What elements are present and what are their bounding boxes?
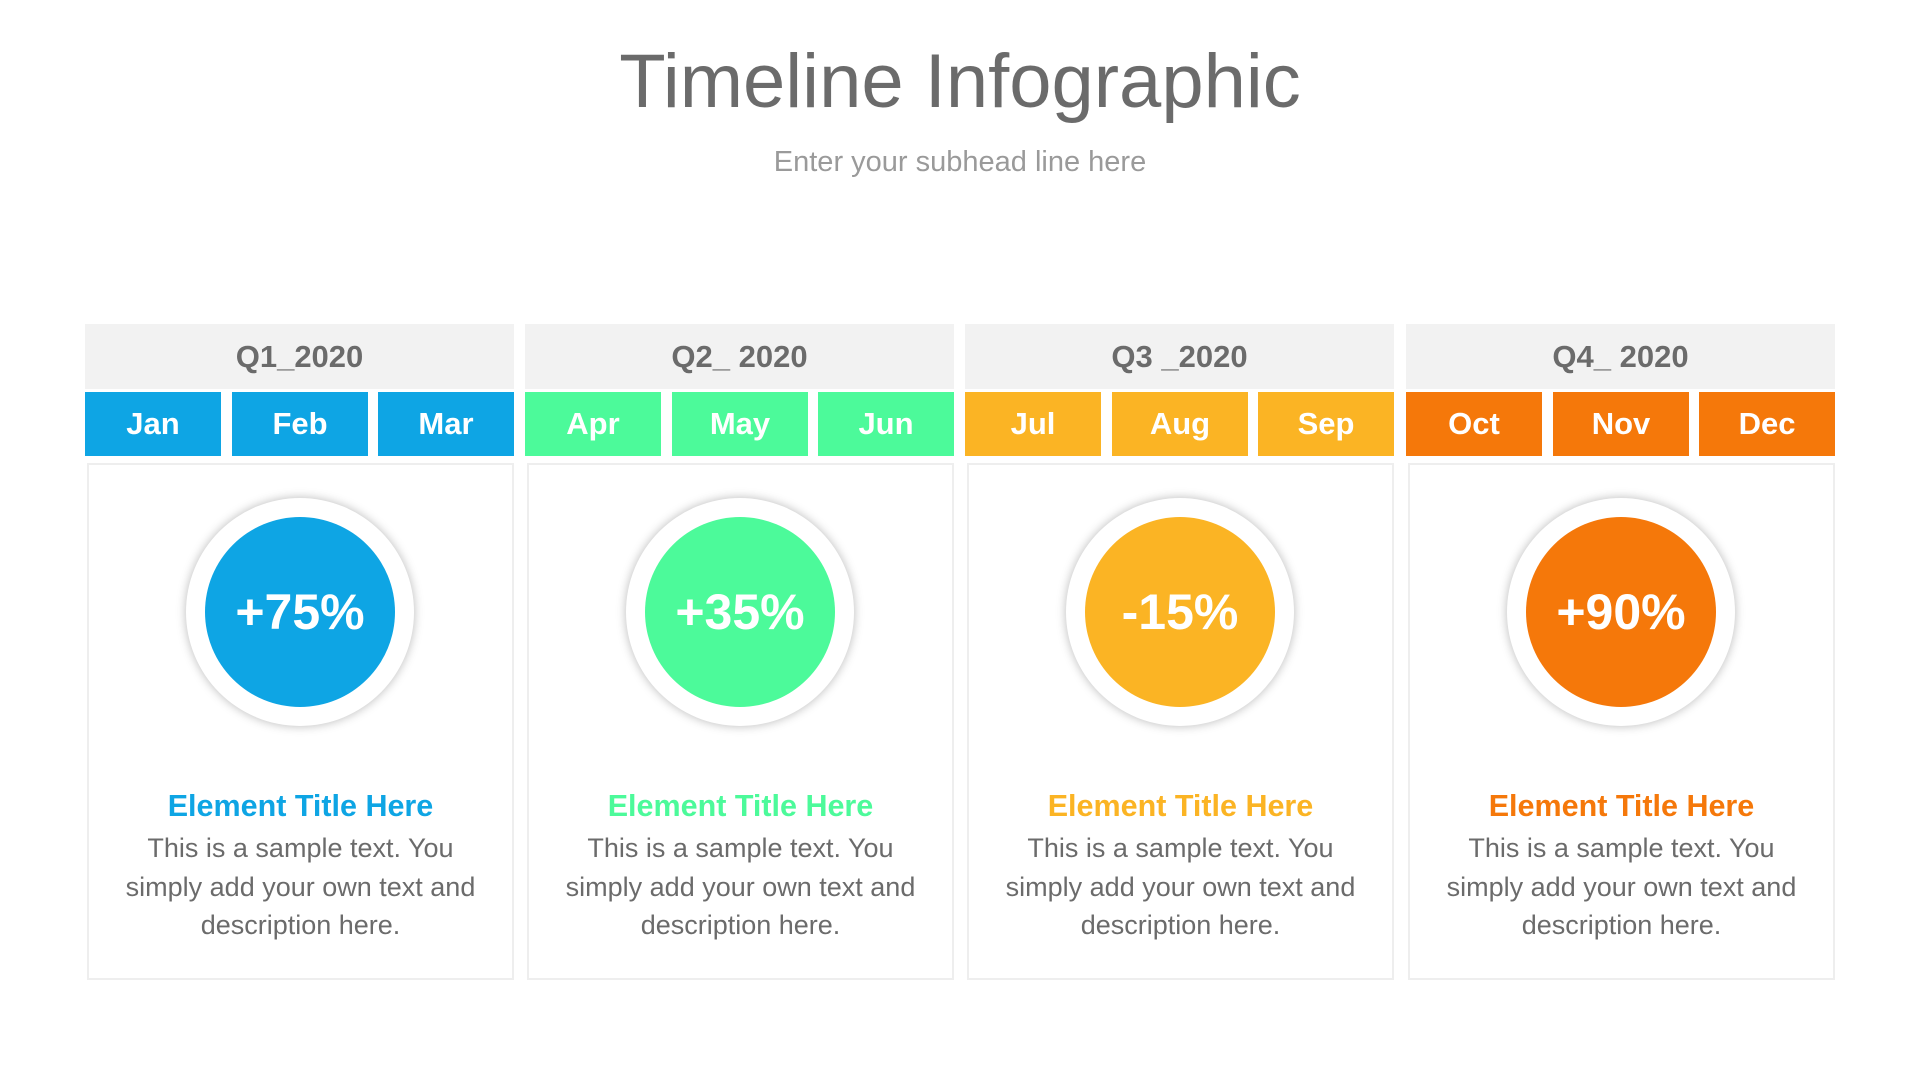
month Jul: Jul xyxy=(1011,406,1055,441)
circle +75% xyxy=(186,498,414,726)
circle +90% xyxy=(1507,498,1735,726)
body text: This is a sample text. You simply add your own text and description here. xyxy=(1447,833,1796,940)
card Q1 xyxy=(87,463,514,980)
month Sep: Sep xyxy=(1298,406,1354,441)
panel: Q1 xyxy=(85,324,514,980)
title: Timeline Infographic xyxy=(619,39,1301,124)
month Feb: Feb xyxy=(272,406,328,441)
quarter header Q4 xyxy=(1406,324,1835,389)
card Q3 xyxy=(967,463,1394,980)
quarter header Q4: Q4_ 2020 xyxy=(1552,339,1689,374)
body text: This is a sample text. You simply add your own text and description here. xyxy=(566,833,915,940)
month Oct xyxy=(1406,392,1542,456)
quarter header Q2 xyxy=(525,324,954,389)
quarter header Q3 xyxy=(965,324,1394,389)
month Jul xyxy=(965,392,1101,456)
panel: Q4 xyxy=(1406,324,1835,980)
quarter header Q3: Q3 _2020 xyxy=(1111,339,1248,374)
body text: This is a sample text. You simply add your own text and description here. xyxy=(126,833,475,940)
element title: Element Title Here xyxy=(1048,789,1313,823)
month Mar xyxy=(378,392,514,456)
month Jan: Jan xyxy=(126,406,180,441)
quarter header Q2: Q2_ 2020 xyxy=(671,339,808,374)
month Jun xyxy=(818,392,954,456)
month Aug: Aug xyxy=(1150,406,1210,441)
month Mar: Mar xyxy=(418,406,474,441)
circle +35%: +35% xyxy=(675,584,805,640)
month Dec xyxy=(1699,392,1835,456)
quarter header Q1 xyxy=(85,324,514,389)
element title: Element Title Here xyxy=(608,789,873,823)
element title: Element Title Here xyxy=(168,789,433,823)
card Q4 xyxy=(1408,463,1835,980)
month May xyxy=(672,392,808,456)
month Jan xyxy=(85,392,221,456)
month Sep xyxy=(1258,392,1394,456)
subhead: Enter your subhead line here xyxy=(774,146,1146,178)
month Oct: Oct xyxy=(1448,406,1500,441)
element title: Element Title Here xyxy=(1489,789,1754,823)
month Nov xyxy=(1553,392,1689,456)
circle +35% xyxy=(626,498,854,726)
month Nov: Nov xyxy=(1592,406,1650,441)
month Feb xyxy=(232,392,368,456)
month Apr xyxy=(525,392,661,456)
circle +90%: +90% xyxy=(1556,584,1686,640)
month May: May xyxy=(710,406,770,441)
month Dec: Dec xyxy=(1739,406,1795,441)
circle -15% xyxy=(1066,498,1294,726)
month Apr: Apr xyxy=(566,406,620,441)
circle +75%: +75% xyxy=(235,584,365,640)
month Aug xyxy=(1112,392,1248,456)
quarter header Q1: Q1_2020 xyxy=(236,339,363,374)
panel: Q3 xyxy=(965,324,1394,980)
circle -15%: -15% xyxy=(1122,584,1238,640)
body text: This is a sample text. You simply add your own text and description here. xyxy=(1006,833,1355,940)
card Q2 xyxy=(527,463,954,980)
month Jun: Jun xyxy=(858,406,914,441)
panel: Q2 xyxy=(525,324,954,980)
